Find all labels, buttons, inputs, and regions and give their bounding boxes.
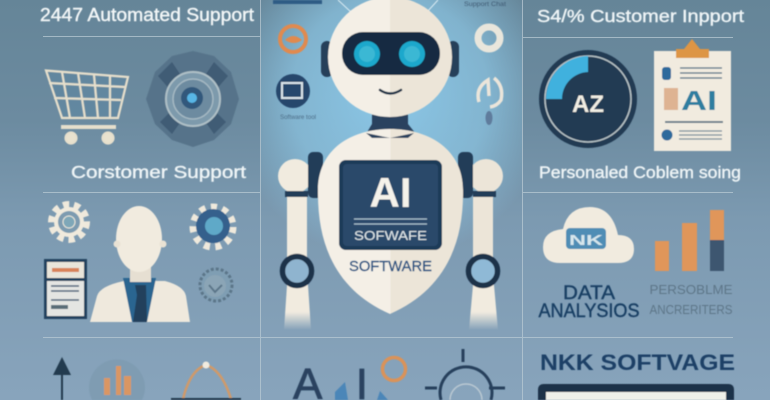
monitor screen	[538, 384, 734, 400]
robot neck	[366, 112, 416, 140]
robot head	[321, 0, 459, 117]
icon: orange ring	[382, 358, 406, 380]
robot antenna lines	[338, 0, 438, 13]
software label: SOFTWARE	[349, 258, 432, 275]
robot right eye	[399, 41, 425, 67]
heading: software name: NKK SOFTVAGE	[540, 350, 735, 375]
icon: clipboard document: AI	[681, 85, 717, 116]
panel: central robot	[273, 0, 506, 330]
robot body	[318, 129, 463, 314]
panel: data analysis (middle right)	[538, 207, 733, 322]
label: personal analytics	[650, 282, 733, 317]
panel: bottom center	[293, 349, 505, 400]
icon: support gear	[146, 51, 239, 147]
label: personal analytics: ANCRERITERS	[650, 302, 733, 317]
icon: up arrow	[53, 357, 71, 400]
robot left eye	[354, 41, 380, 67]
icon: dark blue screen badge	[276, 74, 310, 108]
icon: dial gauge: AZ	[572, 91, 604, 118]
robot smile	[380, 90, 401, 94]
robot figure	[278, 0, 503, 330]
label: personalized problem solving: Personaled Coblem soing	[539, 164, 741, 182]
heading: customer support: S4/% Customer Inpport	[537, 6, 744, 26]
panel: customer support (top left)	[40, 5, 254, 182]
icon: blue gear	[193, 207, 233, 247]
label: data analysis	[538, 283, 640, 322]
icon: cloud	[543, 207, 634, 263]
panel: person and settings (middle left)	[44, 205, 233, 322]
icon: target crosshair	[425, 349, 505, 400]
icon: blue splash	[335, 382, 388, 400]
icon: pale hand	[478, 78, 502, 125]
icon: top banner	[273, 0, 322, 4]
icon: cloud: NK	[569, 232, 603, 249]
chest panel: SOFWAFE	[354, 229, 427, 243]
robot visor	[342, 32, 440, 75]
icon: orange arch bag	[171, 362, 241, 400]
icon: pale chat ring	[478, 27, 500, 49]
robot arms	[278, 152, 503, 330]
icon: report card	[44, 259, 87, 319]
icon: cream gear	[52, 205, 86, 239]
label: customer support: Corstomer Support	[71, 162, 246, 182]
caption: small left label: Software tool	[280, 115, 316, 121]
icon: clipboard document	[654, 39, 731, 151]
icon: dial gauge	[539, 50, 637, 148]
panel: software footer (bottom right)	[538, 350, 735, 400]
chest panel: AI	[370, 169, 412, 216]
icon: shopping cart	[46, 70, 128, 144]
chest panel	[339, 160, 442, 250]
heading: 24/7 automated support: 2447 Automated Support	[40, 5, 254, 25]
caption: small right label: Support Chat	[464, 2, 506, 8]
label: personal analytics: PERSOBLME	[650, 282, 733, 297]
icon: orange circle	[280, 26, 306, 52]
icon: heart badge	[200, 269, 232, 301]
icon: person in suit	[90, 206, 190, 322]
label: data analysis: ANALYSIOS	[538, 301, 640, 322]
panel: bottom left icons	[53, 357, 241, 400]
bar chart	[655, 210, 724, 271]
panel: customer support (top right)	[537, 6, 744, 182]
label: data analysis: DATA	[563, 283, 615, 304]
icon: orange chart badge	[89, 359, 145, 400]
